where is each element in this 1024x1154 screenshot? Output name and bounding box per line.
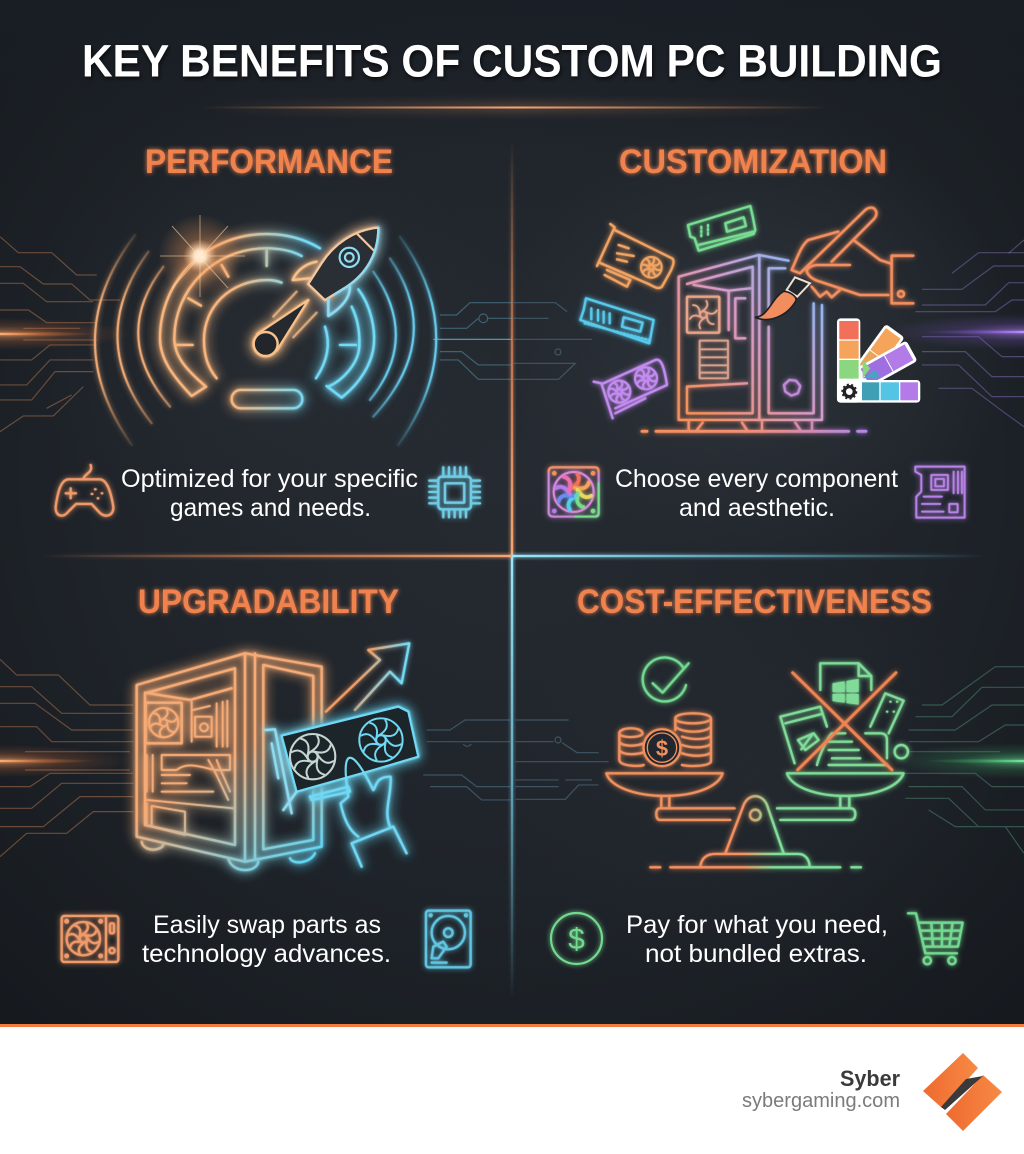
caption: performance	[121, 465, 418, 522]
circuit traces	[515, 667, 1024, 853]
icon: colour swatch fan	[837, 318, 920, 403]
icon: power supply	[62, 916, 118, 962]
circuit traces right	[433, 303, 512, 379]
brand name: Syber	[840, 1066, 900, 1091]
title: KEY BENEFITS OF CUSTOM PC BUILDING	[82, 36, 942, 86]
caption: upgradability	[142, 911, 391, 968]
panel: cost-effectiveness	[515, 583, 1024, 968]
heading: performance: PERFORMANCE	[145, 143, 393, 181]
pc case	[642, 255, 866, 431]
panel: upgradability	[0, 583, 512, 968]
caption: performance: games and needs.	[170, 494, 371, 522]
flare: left edge	[0, 318, 130, 350]
heading: cost-effectiveness: COST-EFFECTIVENESS	[577, 583, 932, 621]
icon: game controller	[56, 465, 113, 516]
panel: customization	[512, 143, 1024, 522]
graphics card and hand	[265, 707, 418, 867]
caption: upgradability: Easily swap parts as	[153, 911, 381, 939]
icon: motherboard	[915, 467, 965, 518]
sound wave arcs	[95, 235, 436, 445]
title divider	[200, 104, 830, 111]
gauge and rocket	[160, 228, 378, 408]
upgrade arrow	[326, 643, 409, 712]
dollar sign: $	[656, 736, 668, 761]
flare: left edge	[0, 745, 130, 777]
icon: green memory module	[688, 206, 755, 251]
icon: rgb fan	[549, 467, 599, 517]
circuit traces	[512, 240, 1024, 427]
caption: customization: Choose every component	[615, 465, 898, 493]
icon: check mark	[643, 657, 689, 701]
pc tower	[137, 653, 322, 870]
icon: coin stacks	[619, 713, 711, 766]
spark flare	[158, 214, 245, 298]
icon: blue memory module	[580, 298, 654, 343]
heading: customization: CUSTOMIZATION	[619, 143, 887, 181]
icon: shopping cart	[908, 913, 963, 964]
icon: hand and paintbrush	[755, 208, 913, 319]
flare: right edge	[884, 314, 1024, 350]
icon: chip	[429, 467, 480, 517]
icon: dollar circle: $	[568, 923, 585, 956]
circuit traces left	[0, 237, 120, 432]
quadrant dividers	[40, 140, 986, 1000]
caption: upgradability: technology advances.	[142, 940, 391, 968]
heading: upgradability: UPGRADABILITY	[138, 583, 399, 621]
x mark	[793, 673, 896, 770]
caption: customization: and aesthetic.	[679, 494, 835, 522]
logo	[923, 1053, 1002, 1131]
icon: hard drive	[426, 911, 471, 967]
panel: performance	[0, 143, 512, 522]
icon: balance scale	[606, 773, 904, 867]
caption: cost-effectiveness: Pay for what you need,	[626, 911, 888, 939]
caption: performance: Optimized for your specific	[121, 465, 418, 493]
icon: dollar circle	[551, 913, 602, 964]
footer	[0, 1024, 1024, 1154]
caption: cost-effectiveness: not bundled extras.	[645, 940, 867, 968]
icon: purple graphics card	[594, 360, 667, 418]
caption: cost-effectiveness	[626, 911, 888, 968]
brand url: sybergaming.com	[742, 1090, 900, 1112]
circuit traces	[0, 659, 512, 857]
icon: orange graphics card	[597, 224, 674, 288]
flare: right edge	[884, 743, 1024, 779]
caption: customization	[615, 465, 898, 522]
icon: bundled software crossed out	[780, 663, 908, 765]
